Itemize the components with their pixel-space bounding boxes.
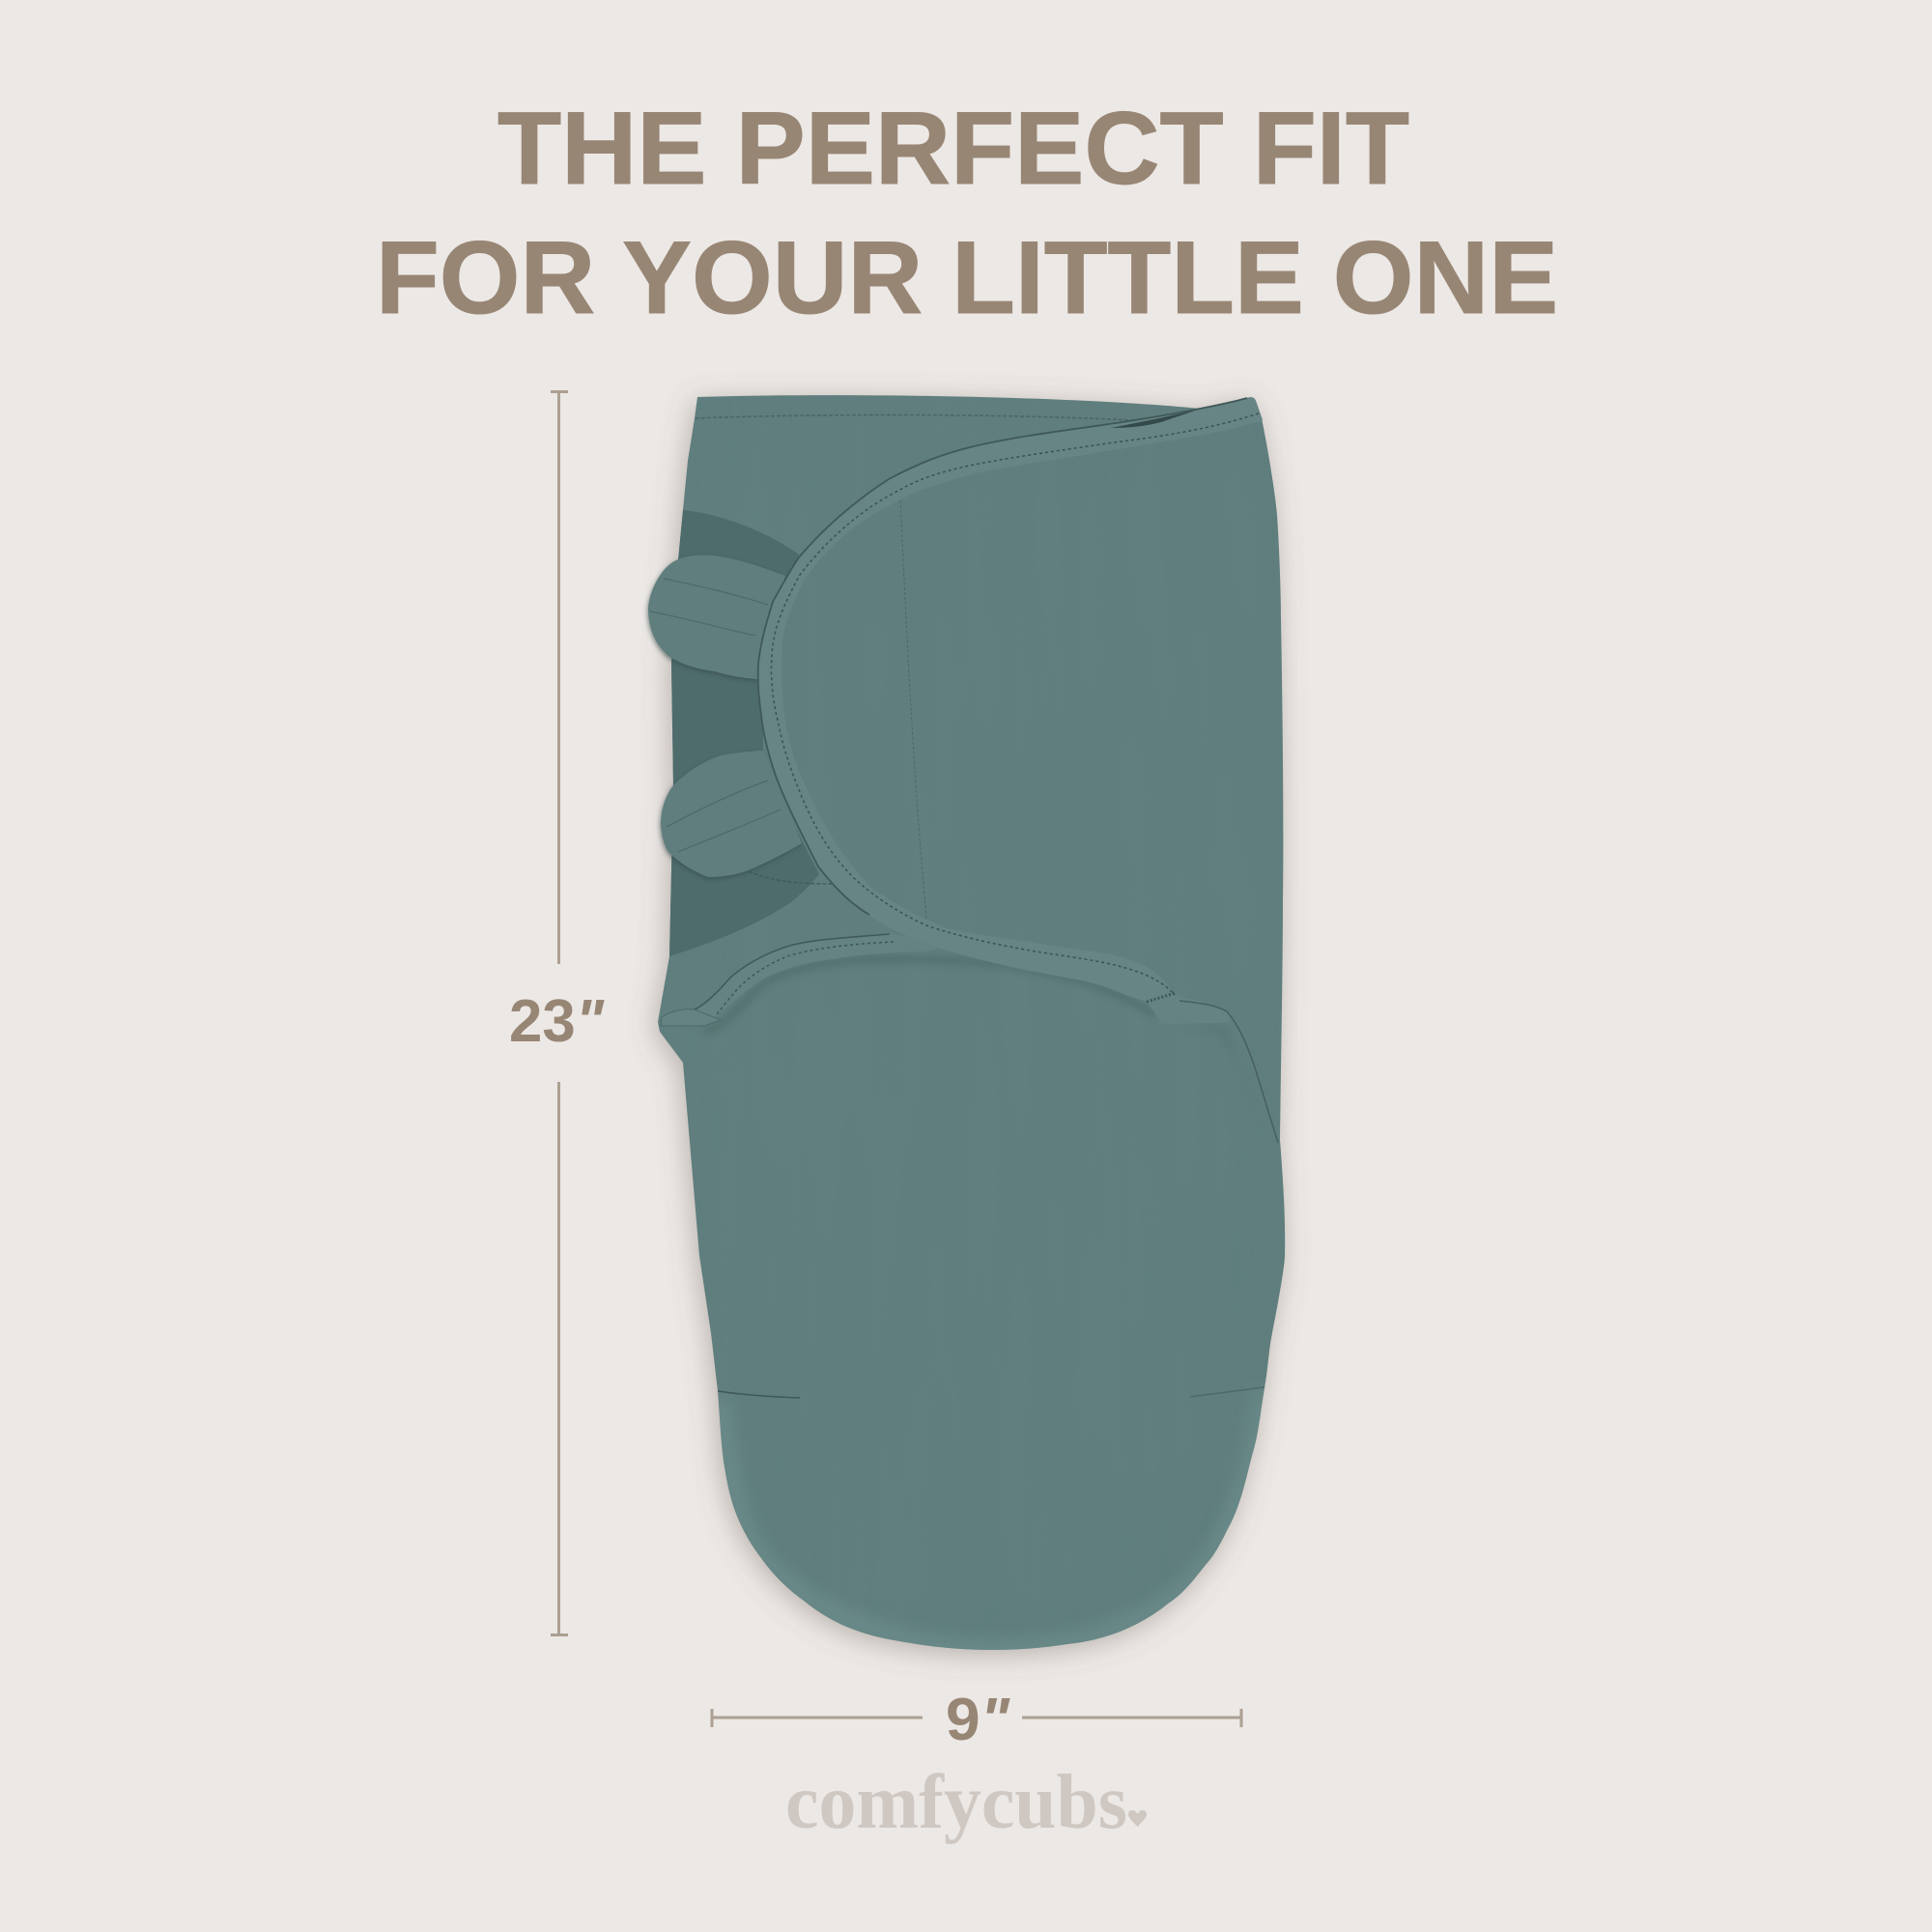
- icon: heart: [1128, 1810, 1147, 1827]
- infographic canvas: [383, 110, 1555, 1844]
- foot seam left: [718, 1391, 800, 1398]
- width line: [712, 1709, 1241, 1727]
- fabric shading: [719, 1401, 1262, 1650]
- wrap flap with banded edge: [758, 397, 1263, 1002]
- lower tab: [661, 751, 802, 877]
- height line: [551, 392, 568, 1634]
- left tuck: [661, 1009, 721, 1026]
- height dimension: [509, 392, 606, 1634]
- width dimension: [712, 1687, 1241, 1753]
- title: [376, 90, 1558, 335]
- height label: 23": [509, 988, 606, 1055]
- width label: 9": [946, 1687, 1011, 1753]
- lower panel seam: [749, 871, 833, 884]
- inner dark panel: [669, 510, 819, 956]
- centre vertical stitch line: [900, 500, 926, 918]
- swaddle garment illustration: [647, 386, 1294, 1662]
- foot seam right: [1190, 1387, 1264, 1397]
- right tuck and side seam: [1147, 995, 1278, 1143]
- brand logo: comfycubs: [785, 1760, 1127, 1845]
- collar hem stitch: [696, 415, 1150, 421]
- title: FOR YOUR LITTLE ONE: [376, 219, 1558, 335]
- collar fold shadow: [1111, 410, 1198, 428]
- lower fold band: [695, 934, 1154, 1032]
- upper tab: [648, 555, 785, 679]
- title: THE PERFECT FIT: [497, 90, 1409, 206]
- garment body silhouette: [658, 395, 1285, 1650]
